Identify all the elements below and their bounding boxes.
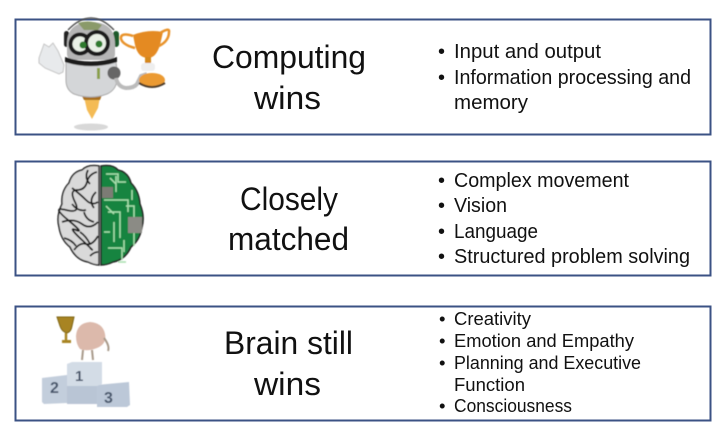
list: computing wins: • [438, 67, 445, 89]
list: computing wins: Input and output [454, 41, 601, 63]
list: closely matched: Complex movement [454, 170, 629, 192]
list: brain still wins: • [439, 352, 445, 373]
list: closely matched: Structured problem solving [454, 246, 690, 268]
list: closely matched: • [438, 170, 445, 192]
icon: brain on podium with trophy: 3 [104, 390, 113, 407]
list: brain still wins: • [439, 308, 445, 329]
list: brain still wins [439, 308, 641, 416]
heading: computing wins: Computing [212, 39, 366, 75]
list: computing wins: Information processing and [454, 67, 691, 89]
list: closely matched: • [438, 195, 445, 217]
heading: brain still wins: Brain still [224, 325, 353, 361]
heading: closely matched: matched [228, 221, 349, 257]
list: brain still wins: Planning and Executive [454, 352, 641, 373]
list: computing wins: • [438, 41, 445, 63]
list: closely matched: Vision [454, 195, 507, 217]
list: brain still wins: Function [454, 374, 525, 395]
icon: robot with trophy [39, 18, 169, 130]
list: brain still wins: Emotion and Empathy [454, 330, 635, 351]
panel: brain still wins [16, 306, 710, 420]
list: brain still wins: • [439, 330, 445, 351]
list: closely matched: • [438, 221, 445, 243]
icon: brain on podium with trophy [42, 317, 130, 407]
list: brain still wins: Creativity [454, 308, 532, 329]
heading: computing wins [212, 39, 366, 116]
list: brain still wins: • [439, 395, 445, 416]
list: computing wins [438, 41, 691, 114]
heading: computing wins: wins [253, 80, 321, 116]
list: brain still wins: Consciousness [454, 395, 572, 416]
list: computing wins: memory [454, 92, 528, 114]
heading: brain still wins: wins [253, 366, 321, 402]
list: closely matched [438, 170, 690, 268]
list: closely matched: Language [454, 221, 538, 243]
icon: brain on podium with trophy: 2 [50, 380, 59, 397]
panel: computing wins [16, 18, 710, 134]
heading: closely matched [228, 181, 349, 257]
heading: closely matched: Closely [240, 181, 338, 217]
list: closely matched: • [438, 246, 445, 268]
heading: brain still wins [224, 325, 353, 402]
icon: half brain half circuit [58, 166, 143, 265]
icon: brain on podium with trophy: 1 [75, 368, 83, 385]
panel: closely matched [16, 162, 710, 276]
